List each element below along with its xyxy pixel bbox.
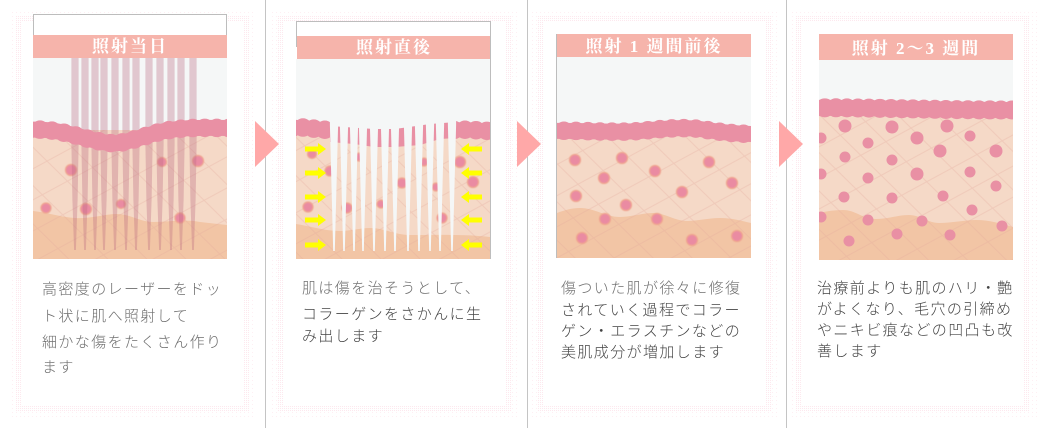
text: description 1: ます (42, 359, 75, 376)
text: description 4: 治療前よりも肌のハリ・艶 (817, 280, 1014, 297)
panel: 照射1週間前後 (532, 10, 777, 418)
banner: 照射当日 (33, 35, 227, 58)
text: description 1: 細かな傷をたくさん作り (42, 334, 222, 351)
arrow 3 (779, 121, 803, 167)
text: description 4 (817, 280, 1014, 360)
illustration: skin repairing (552, 34, 756, 258)
banner: 照射1週間前後 (557, 34, 751, 57)
banner: 照射直後 (297, 36, 490, 59)
banner: 照射2〜3週間: 照射 2〜3 週間 (852, 39, 980, 58)
banner: 照射2〜3週間 (819, 34, 1013, 60)
banner: 照射直後: 照射直後 (356, 38, 432, 57)
illustration: restored skin (814, 34, 1018, 260)
text: description 1: 高密度のレーザーをドッ (42, 281, 222, 298)
panel: 照射2〜3週間 (791, 10, 1037, 418)
text: description 1: ト状に肌へ照射して (42, 308, 189, 325)
text: description 2 (302, 280, 482, 345)
banner: 照射1週間前後: 照射 1 週間前後 (586, 37, 722, 56)
panel: 照射当日 (10, 10, 255, 418)
arrows: yellow inward (305, 143, 482, 251)
text: description 3: されていく過程でコラー (561, 302, 741, 319)
text: description 2: 肌は傷を治そうとして、 (302, 280, 481, 297)
text: description 4: やニキビ痕などの凹凸も改 (817, 322, 1014, 339)
panel: 照射直後 (272, 10, 518, 418)
illustration: laser beams into skin (28, 14, 232, 259)
banner: 照射当日: 照射当日 (92, 36, 168, 56)
panel dividers (266, 0, 786, 428)
text: description 3: ゲン・エラスチンなどの (561, 323, 741, 340)
text: description 2: み出します (302, 328, 384, 345)
text: description 1 (42, 281, 222, 376)
text: description 3 (561, 280, 741, 361)
illustration: micro wounds and yellow arrows (292, 22, 494, 259)
arrow 2 (517, 121, 541, 167)
text: description 3: 美肌成分が増加します (561, 344, 725, 361)
text: description 4: がよくなり、毛穴の引締め (817, 301, 1012, 318)
arrow 1 (255, 121, 279, 167)
text: description 4: 善します (817, 343, 883, 360)
text: description 3: 傷ついた肌が徐々に修復 (561, 280, 741, 297)
text: description 2: コラーゲンをさかんに生 (302, 306, 482, 323)
